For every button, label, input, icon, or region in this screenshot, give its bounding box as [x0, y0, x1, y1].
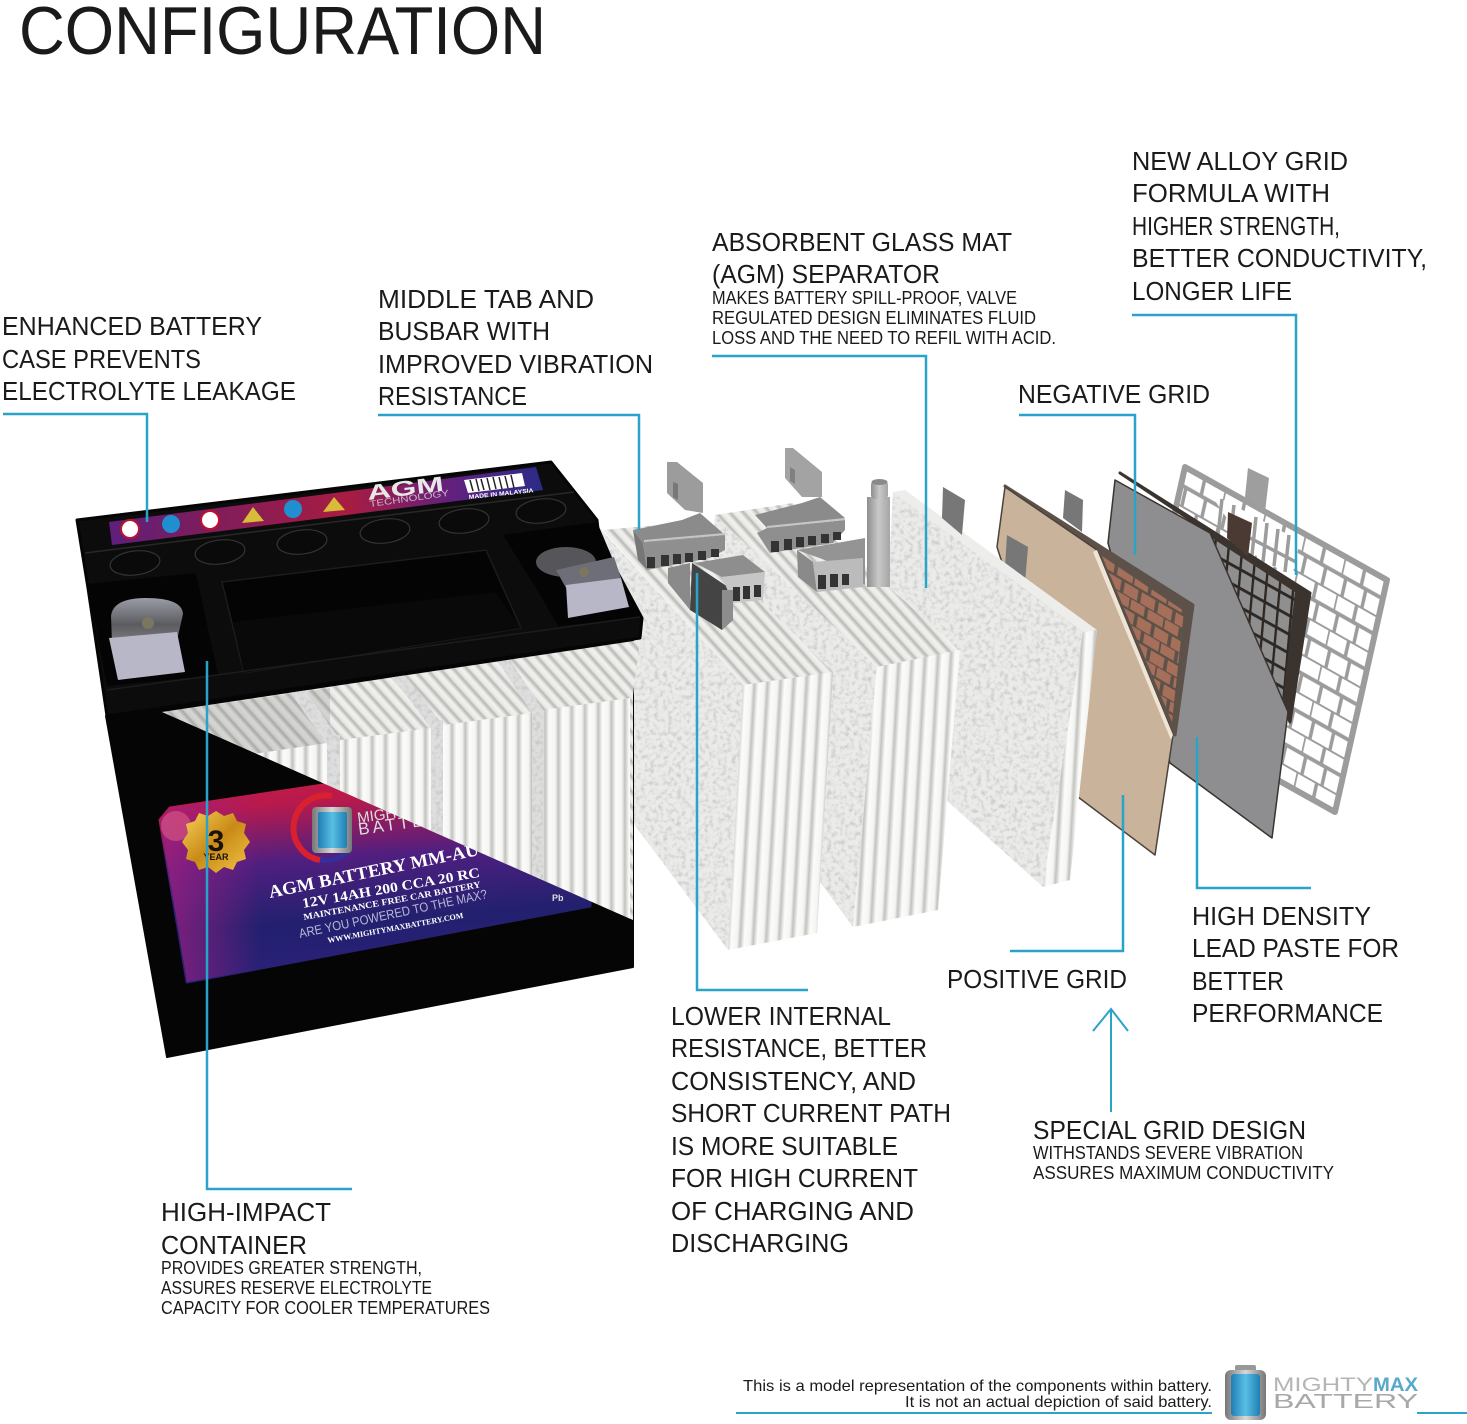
callout: lower internal resistance: CONSISTENCY, AND — [671, 1066, 916, 1096]
battery side label: Pb — [552, 893, 564, 903]
battery side label: ARE YOU POWERED TO THE MAX? — [298, 886, 488, 941]
callout: new alloy grid formula: FORMULA WITH — [1132, 178, 1330, 208]
illustration: positive grid with separator — [997, 486, 1193, 855]
battery side label: MAINTENANCE FREE CAR BATTERY — [303, 879, 482, 922]
callout: lower internal resistance: DISCHARGING — [671, 1228, 849, 1258]
logo: Mighty Max Battery: BATTERY — [1273, 1391, 1418, 1413]
callout: new alloy grid formula: HIGHER STRENGTH, — [1132, 211, 1340, 241]
logo: Mighty Max Battery: MIGHTY — [1273, 1375, 1373, 1396]
callout: high-impact container: PROVIDES GREATER STRENGTH, — [161, 1258, 422, 1278]
callout: high density lead paste: HIGH DENSITY — [1192, 901, 1371, 931]
illustration: exploded alloy grid plate — [1133, 467, 1387, 812]
battery side label: 12V 14AH 200 CCA 20 RC — [301, 866, 481, 912]
illustration: busbars and terminal post — [633, 448, 890, 630]
callout: enhanced battery case: CASE PREVENTS — [2, 344, 201, 374]
illustration: cutaway AGM battery — [77, 462, 642, 1057]
callout: high-impact container: CAPACITY FOR COOLER TEMPERATURES — [161, 1298, 490, 1318]
callout: high-impact container: ASSURES RESERVE ELECTROLYTE — [161, 1278, 432, 1298]
callout: lower internal resistance: IS MORE SUITABLE — [671, 1131, 898, 1161]
illustration: absorbent glass mat — [880, 487, 1097, 887]
illustration: plate stack one — [600, 523, 833, 950]
logo: Mighty Max Battery: MAX — [1373, 1375, 1418, 1396]
logo: Mighty Max Battery — [1225, 1365, 1418, 1420]
arrow: pointing up to positive grid — [1093, 1009, 1128, 1112]
battery side label: BATTERY — [357, 807, 456, 839]
callout: absorbent glass mat separator — [712, 227, 1056, 588]
footer disclaimer — [736, 1378, 1467, 1413]
lid warning strip: TECHNOLOGY — [369, 488, 449, 509]
callout: high density lead paste: BETTER — [1192, 966, 1284, 996]
callout: middle tab and busbar: RESISTANCE — [378, 381, 527, 411]
battery side label: WWW.MIGHTYMAXBATTERY.COM — [327, 911, 464, 945]
exposed plates — [150, 630, 640, 930]
footer disclaimer: This is a model representation of the components within battery. — [743, 1378, 1212, 1395]
left terminal — [109, 598, 185, 680]
callout: high-impact container: HIGH-IMPACT — [161, 1197, 331, 1227]
callout: absorbent glass mat separator: REGULATED DESIGN ELIMINATES FLUID — [712, 308, 1036, 328]
callout: lower internal resistance: FOR HIGH CURRENT — [671, 1163, 918, 1193]
callout: special grid design: ASSURES MAXIMUM CONDUCTIVITY — [1033, 1163, 1334, 1183]
callout: negative grid — [1018, 379, 1210, 555]
callout: high density lead paste: PERFORMANCE — [1192, 998, 1383, 1028]
callout: lower internal resistance: RESISTANCE, BETTER — [671, 1033, 927, 1063]
right terminal — [536, 547, 629, 618]
callout: positive grid: POSITIVE GRID — [947, 964, 1127, 994]
callout: special grid design — [1033, 1115, 1334, 1183]
callout: absorbent glass mat separator: LOSS AND THE NEED TO REFIL WITH ACID. — [712, 328, 1056, 348]
callout: absorbent glass mat separator: (AGM) SEPARATOR — [712, 259, 940, 289]
callout: new alloy grid formula: NEW ALLOY GRID — [1132, 146, 1348, 176]
callout: lower internal resistance: OF CHARGING AND — [671, 1196, 914, 1226]
callout: middle tab and busbar — [378, 284, 653, 530]
callout: enhanced battery case: ELECTROLYTE LEAKAGE — [2, 376, 296, 406]
callout: negative grid: NEGATIVE GRID — [1018, 379, 1210, 409]
callout: absorbent glass mat separator: ABSORBENT GLASS MAT — [712, 227, 1012, 257]
callout: absorbent glass mat separator: MAKES BATTERY SPILL-PROOF, VALVE — [712, 288, 1017, 308]
battery side label — [160, 745, 590, 982]
footer disclaimer: It is not an actual depiction of said battery. — [905, 1394, 1212, 1411]
callout: middle tab and busbar: IMPROVED VIBRATION — [378, 349, 653, 379]
callout: middle tab and busbar: BUSBAR WITH — [378, 316, 550, 346]
callout: positive grid — [947, 795, 1127, 994]
illustration: plate stack two — [700, 503, 960, 927]
callout: high density lead paste: LEAD PASTE FOR — [1192, 933, 1399, 963]
callout: lower internal resistance — [671, 573, 951, 1258]
battery side label: AGM BATTERY MM-AU — [267, 839, 480, 902]
battery container — [106, 640, 633, 1057]
battery side label: 3 — [208, 825, 224, 858]
lid warning strip: MADE IN MALAYSIA — [469, 488, 535, 501]
illustration: negative grid with lead paste — [1108, 473, 1310, 838]
battery side label: YEAR — [203, 852, 229, 862]
callout: new alloy grid formula — [1132, 146, 1427, 575]
callout: new alloy grid formula: LONGER LIFE — [1132, 276, 1292, 306]
callout: enhanced battery case: ENHANCED BATTERY — [2, 311, 262, 341]
callout: new alloy grid formula: BETTER CONDUCTIVITY, — [1132, 243, 1427, 273]
battery side label: MIGHTYMAX — [356, 797, 449, 827]
callout: high-impact container: CONTAINER — [161, 1230, 307, 1260]
lid warning strip: AGM — [366, 473, 445, 505]
callout: lower internal resistance: LOWER INTERNAL — [671, 1001, 891, 1031]
callout: lower internal resistance: SHORT CURRENT PATH — [671, 1098, 951, 1128]
callout: high-impact container — [161, 661, 490, 1318]
callout: middle tab and busbar: MIDDLE TAB AND — [378, 284, 594, 314]
callout: special grid design: SPECIAL GRID DESIGN — [1033, 1115, 1306, 1145]
callout: special grid design: WITHSTANDS SEVERE VIBRATION — [1033, 1143, 1303, 1163]
lid warning strip — [109, 467, 543, 545]
battery lid — [77, 462, 642, 716]
callout: high density lead paste — [1192, 737, 1399, 1028]
callout: enhanced battery case — [2, 311, 296, 522]
